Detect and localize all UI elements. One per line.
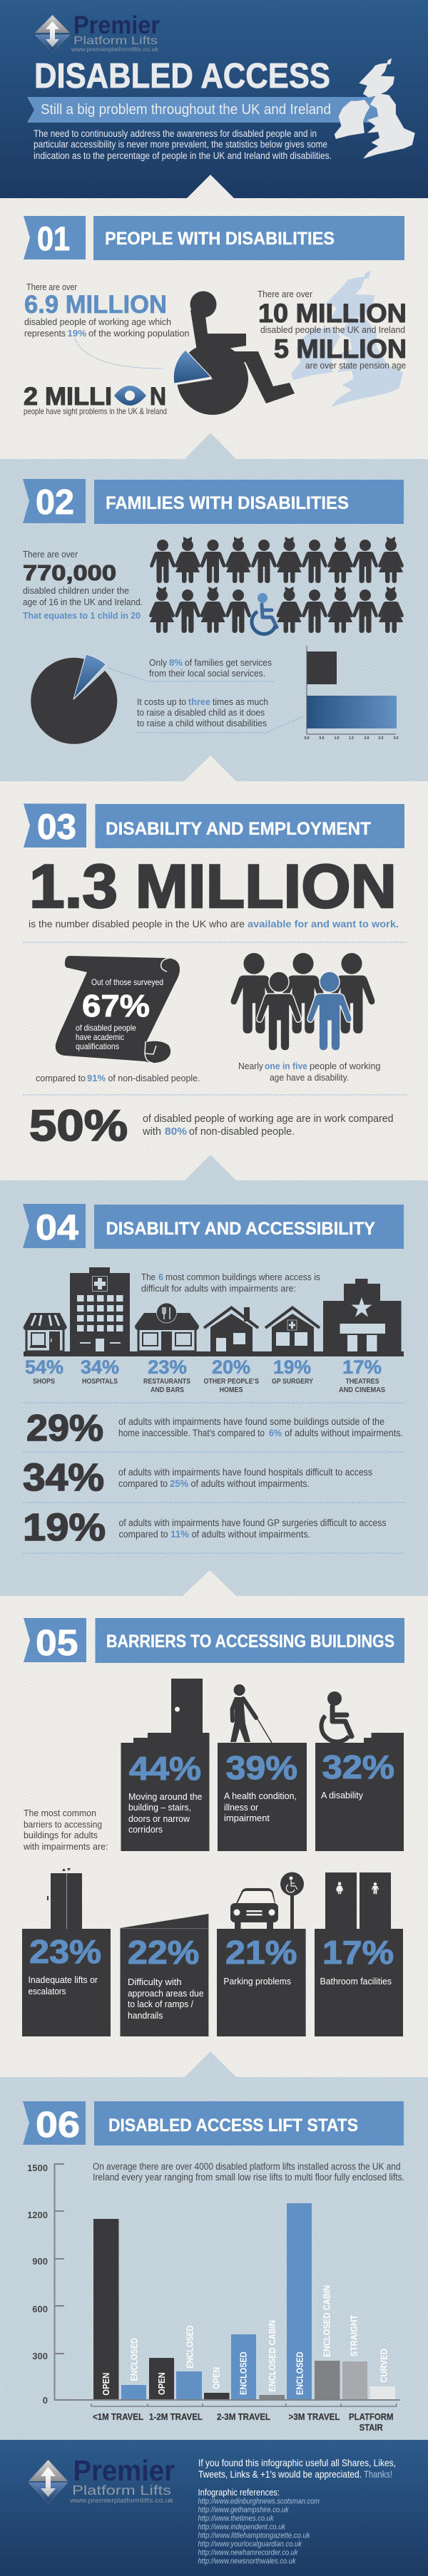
building percentages and labels: OTHER PEOPLE’S xyxy=(204,1378,259,1386)
heading 04: 04 xyxy=(36,1207,78,1247)
6.9 million stat: represents xyxy=(24,328,66,339)
scroll: 67 percent: qualifications xyxy=(76,1041,119,1051)
bar chart: cost of raising a child: 0.0 xyxy=(305,736,310,741)
icon: GP surgery xyxy=(265,1307,320,1351)
bar chart: lifts by travel height: 900 xyxy=(32,2256,48,2267)
building percentages and labels: RESTAURANTS xyxy=(143,1378,190,1386)
bar chart: cost of raising a child: 1.5 xyxy=(349,736,354,741)
bar chart: lifts by travel height: OPEN xyxy=(101,2373,111,2396)
heading 06: 06 xyxy=(36,2104,80,2145)
big stat 1.3 million: available for and want to work. xyxy=(248,918,399,929)
building percentages and labels: 19% xyxy=(273,1356,311,1378)
logo: Premier Platform Lifts xyxy=(29,2454,175,2504)
card: 17 percent bathroom xyxy=(315,1872,403,2036)
stat 19 percent: of adults with impairments have found GP surgeries difficult to access xyxy=(118,1518,387,1528)
intro text: barriers to accessing xyxy=(24,1819,102,1830)
2 million sight stat: people have sight problems in the UK & Ireland xyxy=(24,406,167,416)
heading 04: DISABILITY AND ACCESSIBILITY xyxy=(106,1219,375,1239)
card: 23 percent lifts: 23% xyxy=(29,1933,101,1970)
bar chart: lifts by travel height: 600 xyxy=(32,2304,48,2314)
stat 50 percent xyxy=(29,1101,394,1150)
intro text: The most common xyxy=(24,1808,96,1818)
panel: section 05 barriers to accessing buildings xyxy=(22,1618,404,2036)
bar chart: lifts by travel height: 0 xyxy=(43,2395,48,2406)
intro text: particular accessibility is never more prevalent, the statistics below gives some xyxy=(34,139,327,150)
stat 34 percent: 34% xyxy=(23,1456,104,1499)
card: 22 percent approach areas: to lack of ramps / xyxy=(128,1999,193,2009)
big stat 1.3 million: is the number disabled people in the UK who are xyxy=(29,918,245,929)
bar chart: lifts by travel height: OPEN xyxy=(211,2367,221,2389)
stat 19 percent: 11% xyxy=(170,1529,189,1540)
intro text: difficult for adults with impairments are: xyxy=(141,1283,296,1294)
callout: three times: three xyxy=(188,696,210,707)
building percentages and labels: 23% xyxy=(148,1356,187,1378)
scroll: 67 percent: of disabled people xyxy=(76,1023,136,1033)
770,000 stat: disabled children under the xyxy=(23,585,129,596)
stat 34 percent: of adults with impairments have found hospitals difficult to access xyxy=(118,1467,372,1478)
panel: section 01 people with disabilities xyxy=(24,216,407,416)
stat 34 percent: 25% xyxy=(170,1478,188,1489)
references xyxy=(198,2487,320,2566)
card: 22 percent approach areas xyxy=(120,1914,208,2036)
references: http://www.yourlocalguardian.co.uk xyxy=(198,2540,302,2549)
bar chart: lifts by travel height: 300 xyxy=(32,2351,48,2361)
icon: shop xyxy=(23,1313,67,1351)
icon: eye xyxy=(114,386,146,406)
references: http://www.littlehamptongazette.co.uk xyxy=(198,2532,310,2540)
stat 29 percent: 29% xyxy=(26,1408,103,1449)
bar chart: lifts by travel height: ENCLOSED xyxy=(128,2338,140,2381)
building percentages and labels: SHOPS xyxy=(33,1378,55,1386)
6.9 million stat: disabled people of working age which xyxy=(24,316,171,327)
card: 21 percent parking xyxy=(217,1872,306,2036)
building percentages and labels: AND CINEMAS xyxy=(339,1386,385,1394)
card: 22 percent approach areas: Difficulty with xyxy=(128,1977,181,1987)
10 million stat xyxy=(258,289,407,371)
card: 22 percent approach areas: approach areas due xyxy=(128,1988,204,1999)
icon: blue wheelchair child xyxy=(252,593,277,634)
card: 44 percent moving around: Moving around the xyxy=(128,1791,203,1802)
card: 39 percent health condition: 39% xyxy=(225,1749,297,1786)
logo: Premier Platform Lifts: Platform Lifts xyxy=(72,2483,171,2498)
card: 39 percent health condition: A health condition, xyxy=(224,1791,297,1801)
scroll: 67 percent xyxy=(56,956,180,1063)
icon: hospital xyxy=(70,1267,130,1351)
770,000 stat: That equates to 1 child in 20 xyxy=(23,610,141,621)
panel: header xyxy=(0,0,428,198)
stat 19 percent xyxy=(23,1506,387,1549)
bar chart: lifts by travel height: ENCLOSED xyxy=(238,2351,248,2395)
pie chart: 8 percent xyxy=(31,654,117,744)
card: 44 percent moving around xyxy=(121,1679,210,1851)
6.9 million stat: There are over xyxy=(26,282,78,292)
bar chart: lifts by travel height: ENCLOSED CABIN xyxy=(321,2285,332,2357)
stat 29 percent: of adults without impairments. xyxy=(285,1428,403,1438)
6.9 million stat: 6.9 MILLION xyxy=(24,291,167,319)
10 million stat: 5 MILLION xyxy=(274,334,407,364)
card: 39 percent health condition: impairment xyxy=(224,1813,270,1823)
share message: If you found this infographic useful all Shares, Likes, xyxy=(198,2457,396,2468)
references: http://www.thetimes.co.uk xyxy=(198,2515,274,2523)
card: 21 percent parking: Parking problems xyxy=(223,1976,291,1987)
bar chart: lifts by travel height: ENCLOSED xyxy=(294,2351,305,2395)
heading 03 xyxy=(24,804,404,848)
icon: restaurant xyxy=(135,1303,199,1351)
panel: section 06 disabled access lift stats xyxy=(23,2101,404,2433)
building percentages and labels: AND BARS xyxy=(151,1386,184,1394)
770,000 stat: There are over xyxy=(23,549,78,560)
callout: 8 percent: 8% xyxy=(169,657,183,668)
callout: three times: to raise a disabled child as it does xyxy=(137,707,265,718)
intro text xyxy=(93,2161,404,2183)
map of UK and Ireland xyxy=(335,58,415,159)
stat 19 percent: compared to xyxy=(118,1529,168,1540)
text: one in five: people of working xyxy=(310,1061,381,1071)
card: 21 percent parking: 21% xyxy=(225,1934,297,1971)
building percentages and labels: THEATRES xyxy=(345,1378,379,1386)
card: 39 percent health condition: illness or xyxy=(224,1802,259,1813)
card: 44 percent moving around: 44% xyxy=(129,1750,201,1787)
references: Infographic references: xyxy=(198,2487,280,2498)
bar chart: lifts by travel height: OPEN xyxy=(156,2372,167,2395)
intro text: 6 xyxy=(158,1272,163,1282)
heading 06: DISABLED ACCESS LIFT STATS xyxy=(108,2116,358,2135)
card: 39 percent health condition xyxy=(218,1684,307,1851)
intro text: most common buildings where access is xyxy=(165,1272,320,1282)
bar chart: lifts by travel height: STRAIGHT xyxy=(348,2315,360,2356)
bar chart: lifts by travel height: >3M TRAVEL xyxy=(288,2411,340,2422)
buildings illustration xyxy=(23,1267,404,1356)
references: http://www.newsnorthwales.co.uk xyxy=(198,2557,296,2566)
heading 04 xyxy=(23,1204,404,1249)
bar chart: lifts by travel height: 2-3M TRAVEL xyxy=(217,2411,270,2422)
stat 50 percent: 50% xyxy=(29,1101,128,1150)
card: 23 percent lifts: escalators xyxy=(29,1986,66,1997)
title: DISABLED ACCESS xyxy=(34,57,330,96)
references: http://www.gethampshire.co.uk xyxy=(198,2506,289,2515)
share message: Thanks! xyxy=(364,2468,392,2480)
bar chart: lifts by travel height: ENCLOSED CABIN xyxy=(267,2320,277,2392)
logo: Premier Platform Lifts: www.premierplatformlifts.co.uk xyxy=(71,46,159,53)
bar chart: cost of raising a child: 2.5 xyxy=(379,736,384,741)
intro text: The xyxy=(141,1272,156,1282)
card: 44 percent moving around: doors or narrow xyxy=(128,1813,190,1824)
text: compared to 91 percent xyxy=(36,1073,200,1083)
770,000 stat: age of 16 in the UK and Ireland. xyxy=(23,597,143,607)
references: http://www.independent.co.uk xyxy=(198,2523,285,2532)
building percentages and labels: 20% xyxy=(212,1356,250,1378)
pictogram: children xyxy=(149,537,404,634)
intro text: with impairments are: xyxy=(23,1841,108,1852)
card: 23 percent lifts xyxy=(22,1868,111,2036)
intro text xyxy=(23,1808,108,1852)
bar chart: lifts by travel height: 1200 xyxy=(27,2210,48,2220)
callout: 8 percent: of families get services xyxy=(185,657,272,668)
callout: 8 percent: from their local social services. xyxy=(149,668,265,679)
card: 44 percent moving around: corridors xyxy=(128,1824,163,1835)
10 million stat: disabled people in the UK and Ireland xyxy=(260,324,405,335)
building percentages and labels: 54% xyxy=(25,1356,63,1378)
bar chart: lifts by travel height: PLATFORM xyxy=(349,2411,394,2422)
pale map xyxy=(291,270,403,407)
stat 50 percent: of non-disabled people. xyxy=(189,1126,295,1138)
card: 32 percent disability xyxy=(315,1691,404,1851)
bar chart: cost of raising a child: 3.0 xyxy=(394,736,399,741)
logo: Premier Platform Lifts xyxy=(35,11,160,53)
bar chart: cost of raising a child: 0.5 xyxy=(320,736,325,741)
bar chart: cost of raising a child xyxy=(305,646,399,741)
intro text xyxy=(141,1272,320,1294)
text: one in five xyxy=(238,1061,381,1083)
logo: Premier Platform Lifts: Premier xyxy=(73,11,160,39)
callout: three times: It costs up to xyxy=(137,696,186,707)
card: 23 percent lifts: Inadequate lifts or xyxy=(29,1974,98,1985)
card: 22 percent approach areas: handrails xyxy=(128,2010,163,2021)
references: http://www.edinburghnews.scotsman.com xyxy=(198,2498,320,2506)
logo: Premier Platform Lifts: Premier xyxy=(73,2454,175,2487)
text: one in five: Nearly xyxy=(238,1061,263,1071)
text: compared to 91 percent: 91% xyxy=(87,1073,106,1083)
770,000 stat xyxy=(23,549,143,621)
2 million sight stat: N xyxy=(150,383,166,411)
building percentages and labels: 34% xyxy=(81,1356,119,1378)
stat 34 percent: of adults without impairments. xyxy=(191,1478,310,1489)
card: 22 percent approach areas: 22% xyxy=(128,1934,199,1971)
callout: three times xyxy=(137,696,268,728)
6.9 million stat: of the working population xyxy=(88,328,190,339)
intro text: The need to continuously address the awareness for disabled people and in xyxy=(34,128,317,139)
references: http://www.newhamrecorder.co.uk xyxy=(198,2549,298,2557)
callout: 8 percent: Only xyxy=(149,657,167,668)
card: 44 percent moving around: building – stairs, xyxy=(128,1802,191,1813)
stat 50 percent: with xyxy=(142,1126,161,1138)
ribbon subtitle: Still a big problem throughout the UK and Ireland xyxy=(41,102,331,118)
building percentages and labels: HOSPITALS xyxy=(82,1378,118,1386)
stat 19 percent: of adults without impairments. xyxy=(191,1529,310,1540)
icon: theatre xyxy=(323,1279,401,1351)
building percentages and labels: HOMES xyxy=(220,1386,243,1394)
text: one in five: one in five xyxy=(265,1061,307,1071)
stat 50 percent: 80% xyxy=(165,1126,187,1138)
10 million stat: 10 MILLION xyxy=(258,299,407,328)
panel: section 04 disability and accessibility xyxy=(23,1204,406,1553)
770,000 stat: 770,000 xyxy=(23,560,116,585)
10 million stat: are over state pension age xyxy=(305,360,406,371)
panel: section 03 disability and employment xyxy=(23,804,407,1150)
stat 34 percent: compared to xyxy=(118,1478,168,1489)
stat 29 percent: of adults with impairments have found some buildings outside of the xyxy=(118,1416,384,1427)
stat 19 percent: 19% xyxy=(23,1506,106,1549)
panel: footer xyxy=(0,2440,428,2576)
heading 02: FAMILIES WITH DISABILITIES xyxy=(106,493,349,513)
text: compared to 91 percent: compared to xyxy=(36,1073,86,1083)
heading 03: DISABILITY AND EMPLOYMENT xyxy=(106,819,371,839)
6.9 million stat xyxy=(24,282,190,339)
bar chart: lifts by travel height: 1500 xyxy=(27,2163,48,2173)
bar chart: cost of raising a child: 1.0 xyxy=(335,736,340,741)
6.9 million stat: 19% xyxy=(67,328,86,339)
share message: Tweets, Links & +1's would be appreciated. xyxy=(198,2468,362,2480)
callout: three times: times as much xyxy=(213,696,268,707)
scroll: 67 percent: 67% xyxy=(82,989,150,1024)
bar chart: lifts by travel height xyxy=(27,2163,400,2433)
big stat 1.3 million: 1.3 MILLION xyxy=(29,852,397,921)
bar chart: lifts by travel height: ENCLOSED xyxy=(184,2325,195,2369)
heading 06 xyxy=(23,2101,404,2145)
10 million stat: There are over xyxy=(258,289,313,299)
pictogram: one in five people xyxy=(231,953,374,1051)
intro text: buildings for adults xyxy=(24,1830,98,1840)
callout: three times: to raise a child without disabilities xyxy=(137,718,267,728)
building percentages and labels xyxy=(25,1356,385,1394)
heading 01: PEOPLE WITH DISABILITIES xyxy=(105,229,335,249)
bar chart: cost of raising a child: 2.0 xyxy=(365,736,370,741)
logo: Premier Platform Lifts: Platform Lifts xyxy=(73,35,158,47)
heading 01 xyxy=(24,216,404,260)
stat 29 percent xyxy=(26,1408,403,1449)
card: 17 percent bathroom: 17% xyxy=(322,1934,394,1971)
icon: house xyxy=(204,1307,258,1351)
card: 17 percent bathroom: Bathroom facilities xyxy=(320,1976,392,1987)
text: one in five: age have a disability. xyxy=(270,1072,349,1083)
intro text: indication as to the percentage of people in the UK and Ireland with disabilities. xyxy=(34,150,332,161)
heading 03: 03 xyxy=(37,807,76,847)
card: 32 percent disability: 32% xyxy=(322,1748,394,1786)
intro text xyxy=(34,128,332,161)
stat 29 percent: 6% xyxy=(269,1428,282,1438)
bar chart: lifts by travel height: 1-2M TRAVEL xyxy=(149,2411,203,2422)
heading 05 xyxy=(24,1618,404,1663)
ribbon subtitle xyxy=(27,97,383,123)
stat 34 percent xyxy=(23,1456,372,1499)
icon: wheelchair user with pie slice xyxy=(173,291,295,415)
bar chart: lifts by travel height: STAIR xyxy=(360,2422,383,2433)
scroll: 67 percent: Out of those surveyed xyxy=(91,977,163,987)
share message xyxy=(198,2457,396,2480)
scroll: 67 percent: have academic xyxy=(76,1032,124,1042)
stat 50 percent: of disabled people of working age are in work compared xyxy=(143,1113,394,1125)
2 million sight stat: 2 MILLI xyxy=(24,383,112,411)
card: 32 percent disability: A disability xyxy=(321,1790,363,1800)
callout: 8 percent xyxy=(149,657,272,679)
bar chart: lifts by travel height: CURVED xyxy=(378,2349,389,2383)
stat 29 percent: home inaccessible. That's compared to xyxy=(118,1428,265,1438)
heading 02 xyxy=(23,479,404,524)
text: compared to 91 percent: of non-disabled people. xyxy=(108,1073,200,1083)
building percentages and labels: GP SURGERY xyxy=(272,1378,313,1386)
heading 01: 01 xyxy=(37,220,70,257)
bar chart: lifts by travel height: <1M TRAVEL xyxy=(93,2411,143,2422)
heading 02: 02 xyxy=(36,483,74,522)
panel: section 02 families with disabilities xyxy=(23,479,404,744)
building percentages and labels: 17% xyxy=(342,1356,382,1378)
logo: Premier Platform Lifts: www.premierplatformlifts.co.uk xyxy=(69,2497,174,2504)
2 million sight stat xyxy=(24,383,167,416)
heading 05: 05 xyxy=(36,1622,78,1663)
